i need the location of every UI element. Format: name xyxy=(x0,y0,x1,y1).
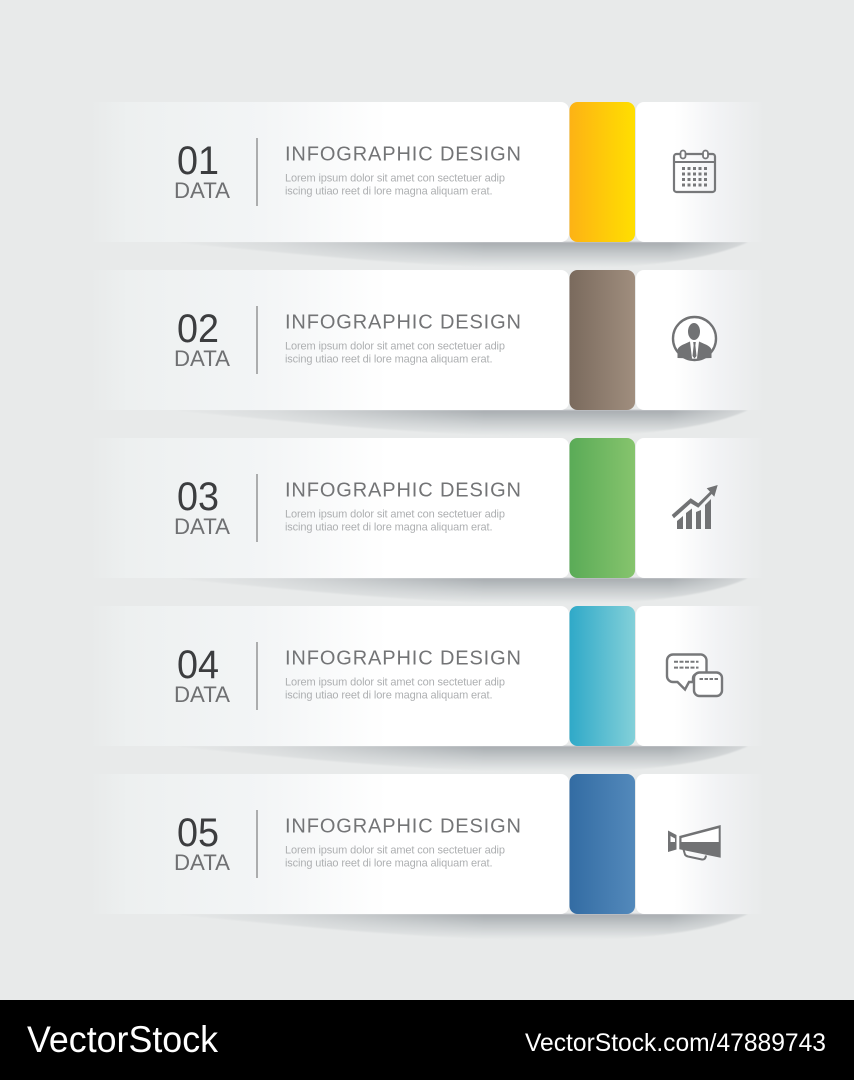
colour tab 02 xyxy=(570,270,635,410)
body text 05: Lorem ipsum dolor sit amet con sectetuer adip xyxy=(285,844,505,856)
divider 03 xyxy=(256,474,258,542)
panel: row 04 xyxy=(90,606,765,774)
heading 03: INFOGRAPHIC DESIGN xyxy=(285,480,521,502)
icon: businessman xyxy=(673,317,716,360)
left card 01 xyxy=(90,102,569,242)
body text 04: Lorem ipsum dolor sit amet con sectetuer adip xyxy=(285,676,505,688)
panel: row 05 xyxy=(90,774,765,942)
drop shadow 04 xyxy=(165,744,755,774)
drop shadow 05 xyxy=(165,912,755,942)
body text 02 line 2: iscing utiao reet di lore magna aliquam erat. xyxy=(285,354,492,366)
left card 05 xyxy=(90,774,569,914)
heading 01: INFOGRAPHIC DESIGN xyxy=(285,144,521,166)
icon: calendar xyxy=(674,150,715,192)
label 03: DATA xyxy=(174,514,230,539)
right card 05 xyxy=(636,774,765,914)
label 04: DATA xyxy=(174,682,230,707)
colour tab 04 xyxy=(570,606,635,746)
label 01: DATA xyxy=(174,178,230,203)
icon: chat bubbles xyxy=(667,654,722,696)
heading 05: INFOGRAPHIC DESIGN xyxy=(285,816,521,838)
body text 05 line 2: iscing utiao reet di lore magna aliquam erat. xyxy=(285,858,492,870)
right card 01 xyxy=(636,102,765,242)
body text 03 line 2: iscing utiao reet di lore magna aliquam erat. xyxy=(285,522,492,534)
right card 04 xyxy=(636,606,765,746)
body text 01 line 2: iscing utiao reet di lore magna aliquam erat. xyxy=(285,186,492,198)
left card 04 xyxy=(90,606,569,746)
body text 04 line 2: iscing utiao reet di lore magna aliquam erat. xyxy=(285,690,492,702)
divider 01 xyxy=(256,138,258,206)
number 02: 02 xyxy=(177,307,219,351)
colour tab 05 xyxy=(570,774,635,914)
divider 05 xyxy=(256,810,258,878)
panel: row 02 xyxy=(90,270,765,438)
number 05: 05 xyxy=(177,811,219,855)
label 05: DATA xyxy=(174,850,230,875)
heading 04: INFOGRAPHIC DESIGN xyxy=(285,648,521,670)
colour tab 03 xyxy=(570,438,635,578)
watermark bar xyxy=(0,1000,854,1080)
panel: row 01 xyxy=(90,102,765,270)
divider 02 xyxy=(256,306,258,374)
watermark logo: VectorStock xyxy=(27,1019,218,1060)
left card 03 xyxy=(90,438,569,578)
body text 03: Lorem ipsum dolor sit amet con sectetuer adip xyxy=(285,508,505,520)
right card 02 xyxy=(636,270,765,410)
left card 02 xyxy=(90,270,569,410)
number 04: 04 xyxy=(177,643,219,687)
number 03: 03 xyxy=(177,475,219,519)
watermark url: VectorStock.com/47889743 xyxy=(525,1029,826,1057)
drop shadow 01 xyxy=(165,240,755,270)
icon: megaphone xyxy=(668,825,721,860)
colour tab 01 xyxy=(570,102,635,242)
drop shadow 02 xyxy=(165,408,755,438)
icon: growth chart xyxy=(672,485,718,529)
right card 03 xyxy=(636,438,765,578)
body text 02: Lorem ipsum dolor sit amet con sectetuer adip xyxy=(285,340,505,352)
panel: row 03 xyxy=(90,438,765,606)
number 01: 01 xyxy=(177,139,219,183)
drop shadow 03 xyxy=(165,576,755,606)
body text 01: Lorem ipsum dolor sit amet con sectetuer adip xyxy=(285,172,505,184)
label 02: DATA xyxy=(174,346,230,371)
heading 02: INFOGRAPHIC DESIGN xyxy=(285,312,521,334)
divider 04 xyxy=(256,642,258,710)
